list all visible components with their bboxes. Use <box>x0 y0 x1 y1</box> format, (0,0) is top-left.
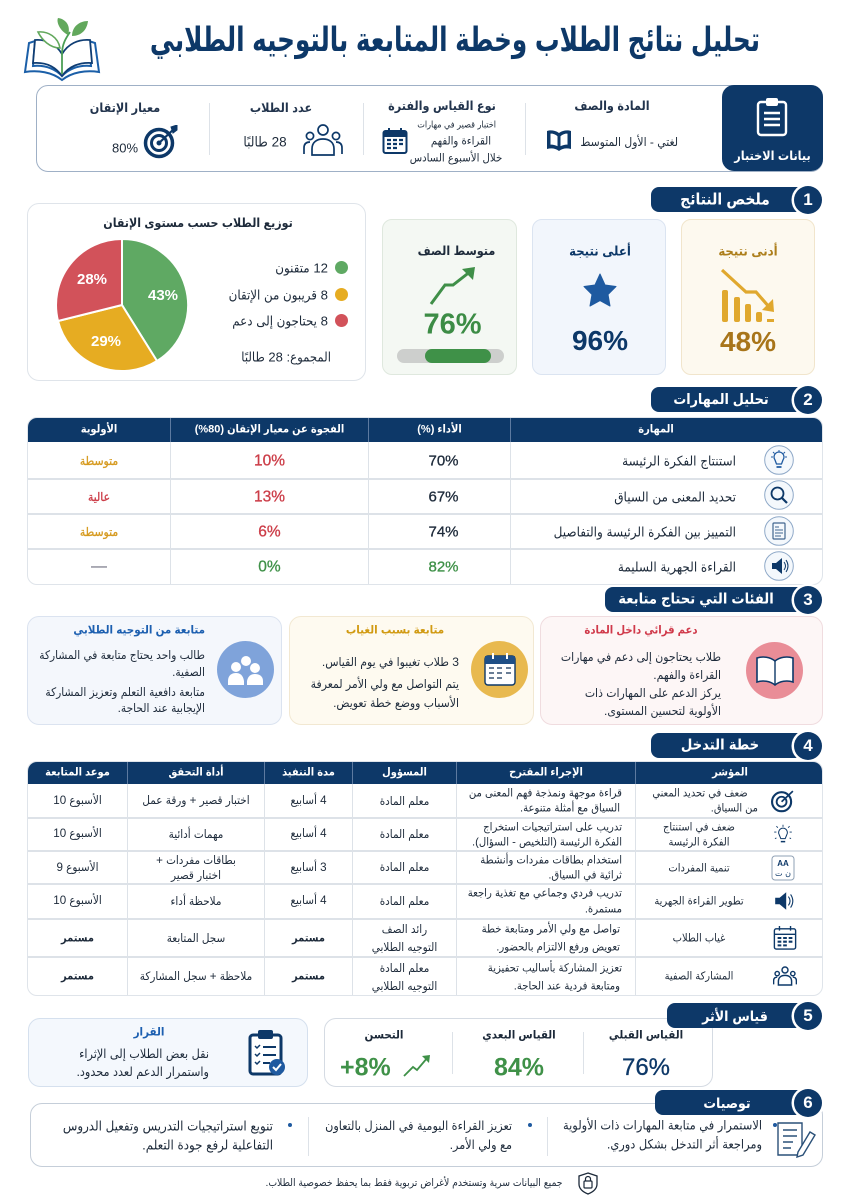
item: student count: عدد الطلاب <box>250 101 312 115</box>
row: meaning weakness: السياق مع أمثلة متنوعة. <box>520 802 620 814</box>
row: vocabulary: ثرائية في السياق. <box>548 869 622 881</box>
section heading 6: توصيات <box>703 1095 751 1111</box>
card: absence follow-up: الأسباب ووضع خطة تعويض. <box>333 696 459 710</box>
table header: أداة التحقق <box>168 766 224 778</box>
metric: post-measure <box>482 1029 556 1082</box>
item: measurement type and period <box>382 99 502 164</box>
row: main idea: 10% <box>254 452 285 469</box>
row: class participation: التوجيه الطلابي <box>372 980 437 993</box>
icon: clipboard <box>756 98 788 136</box>
section heading 4: خطة التدخل <box>681 738 759 754</box>
section heading 5: قياس الأثر <box>702 1008 768 1024</box>
row: absence <box>60 922 796 954</box>
row: main idea vs details: التمييز بين الفكرة الرئيسة والتفاصيل <box>554 524 736 539</box>
row: vocabulary: استخدام بطاقات مفردات وأنشطة <box>480 854 622 866</box>
row: class participation: مستمر <box>61 970 94 982</box>
panel: decision: نقل بعض الطلاب إلى الإثراء <box>79 1047 209 1061</box>
label: test data: بيانات الاختبار <box>734 149 811 163</box>
icon: calendar circle <box>471 641 528 698</box>
row: oral reading development: مستمرة. <box>585 903 622 915</box>
row: vocabulary: تنمية المفردات <box>668 862 730 874</box>
row: meaning from context: تحديد المعنى من السياق <box>614 489 736 504</box>
row: main idea <box>80 445 794 475</box>
row: oral reading: — <box>91 558 107 575</box>
row: main idea vs details <box>80 516 794 546</box>
card: highest score: 96% <box>572 325 628 356</box>
progress bar <box>397 349 504 363</box>
card: highest score <box>532 219 666 375</box>
row: meaning from context: 67% <box>428 488 459 506</box>
table header: المسؤول <box>382 766 427 778</box>
icon: shield lock <box>578 1172 598 1195</box>
legend: near mastery: 8 قريبون من الإتقان <box>229 287 328 302</box>
row: class participation: ومتابعة فردية عند الحاجة. <box>514 980 620 992</box>
metric: improvement <box>340 1029 430 1082</box>
table header: المؤشر <box>712 766 748 778</box>
item: measurement type and period: خلال الأسبوع السادس <box>410 152 502 164</box>
row: vocabulary: بطاقات مفردات + <box>156 854 236 867</box>
section heading 6: 6 <box>803 1093 813 1112</box>
card: guidance follow-up: الصفية. <box>172 665 205 679</box>
row: oral reading development: معلم المادة <box>380 895 429 908</box>
table header: الفجوة عن معيار الإتقان (80%) <box>195 424 344 436</box>
metric: post-measure: القياس البعدي <box>482 1029 556 1041</box>
card: reading support <box>540 616 823 725</box>
icon: falling chart <box>721 268 774 322</box>
item: student count: 28 طالبًا <box>243 134 287 149</box>
card: guidance follow-up: متابعة من التوجيه الطلابي <box>73 624 205 636</box>
chart title: توزيع الطلاب حسب مستوى الإتقان <box>103 216 293 230</box>
card: guidance follow-up: الإيجابية عند الحاجة. <box>118 701 205 715</box>
icon: star <box>584 274 616 306</box>
card: guidance follow-up <box>27 616 282 725</box>
card: absence follow-up: 3 طلاب تغيبوا في يوم القياس. <box>322 655 459 669</box>
row: main idea weakness: مهمات أدائية <box>169 828 223 841</box>
row: main idea weakness: الأسبوع 10 <box>53 827 102 840</box>
metric: pre-measure <box>609 1029 683 1081</box>
row: oral reading development: 4 أسابيع <box>290 894 327 907</box>
item: subject and class: لغتي - الأول المتوسط <box>580 135 678 149</box>
row: oral reading development: ملاحظة أداء <box>170 895 221 908</box>
card: absence follow-up: يتم التواصل مع ولي الأمر لمعرفة <box>311 677 459 691</box>
panel: impact measurement <box>324 1018 713 1087</box>
metric: pre-measure: 76% <box>622 1054 670 1081</box>
row: oral reading: 82% <box>428 558 459 576</box>
row: meaning weakness: قراءة موجهة ونمذجة فهم المعنى من <box>469 787 622 799</box>
section heading 5: 5 <box>803 1006 813 1025</box>
item: mastery criterion <box>90 101 178 158</box>
table: skills analysis <box>27 417 823 585</box>
table header: مدة التنفيذ <box>282 766 335 778</box>
row: main idea vs details: 6% <box>258 523 281 540</box>
row: oral reading development <box>53 887 794 915</box>
recommendation 1 <box>563 1118 777 1152</box>
logo: open book with plant <box>24 18 100 82</box>
row: oral reading <box>91 551 794 581</box>
row: vocabulary <box>56 852 794 882</box>
row: absence: غياب الطلاب <box>673 932 725 944</box>
item: subject and class: المادة والصف <box>574 99 650 113</box>
pie chart: 43% <box>148 287 178 304</box>
row: class participation: مستمر <box>292 970 325 982</box>
footer: privacy note: جميع البيانات سرية وتستخدم لأغراض تربوية فقط بما يحفظ خصوصية الطلاب. <box>265 1178 563 1189</box>
row: class participation: معلم المادة <box>380 962 429 975</box>
section heading 6 <box>655 1089 822 1117</box>
section heading 3: الفئات التي تحتاج متابعة <box>618 592 774 608</box>
recommendation 2 <box>325 1119 532 1152</box>
icon: document and pen <box>777 1122 816 1158</box>
row: main idea weakness: ضعف في استنتاج <box>663 822 735 834</box>
table header: المهارة <box>638 424 674 436</box>
card: lowest score: أدنى نتيجة <box>718 244 778 258</box>
row: absence: رائد الصف <box>382 923 427 936</box>
row: main idea weakness: الفكرة الرئيسة <box>668 836 730 848</box>
table: intervention plan <box>27 761 823 996</box>
recommendation 3 <box>63 1118 292 1153</box>
item: student count <box>243 101 343 156</box>
legend: mastered: 12 متقنون <box>275 260 328 275</box>
row: vocabulary: ن ت <box>775 869 791 878</box>
recommendation 2: تعزيز القراءة اليومية في المنزل بالتعاون <box>325 1119 512 1133</box>
row: meaning weakness: الأسبوع 10 <box>53 794 102 807</box>
row: absence: مستمر <box>61 932 94 944</box>
table header: الأولوية <box>81 424 117 436</box>
card: reading support: طلاب يحتاجون إلى دعم في مهارات <box>561 650 721 664</box>
section heading 4: 4 <box>803 736 813 755</box>
card: class average: متوسط الصف <box>418 244 495 258</box>
panel: decision <box>28 1018 308 1087</box>
row: absence: مستمر <box>292 932 325 944</box>
item: subject and class <box>547 99 678 151</box>
row: main idea weakness <box>53 821 792 848</box>
footer: privacy note <box>260 1172 605 1196</box>
icon: clipboard check <box>248 1030 285 1076</box>
chart total: المجموع: 28 طالبًا <box>241 350 331 364</box>
card: highest score: أعلى نتيجة <box>569 244 631 258</box>
row: oral reading development: تطوير القراءة الجهرية <box>654 896 744 908</box>
row: absence: التوجيه الطلابي <box>372 941 437 954</box>
row: oral reading: 0% <box>258 558 281 575</box>
row: vocabulary: AA <box>777 859 789 868</box>
section heading 5 <box>667 1002 822 1030</box>
panel: distribution pie chart <box>27 203 366 381</box>
section heading 3: 3 <box>803 590 813 609</box>
section heading 2 <box>651 386 822 414</box>
row: meaning weakness: اختبار قصير + ورقة عمل <box>142 794 250 807</box>
legend: mastered <box>275 260 348 276</box>
row: main idea weakness: 4 أسابيع <box>290 827 327 840</box>
metric: pre-measure: القياس القبلي <box>609 1029 683 1041</box>
panel: recommendations <box>30 1103 823 1167</box>
card: reading support: يركز الدعم على المهارات ذات <box>585 686 721 700</box>
pie chart: 29% <box>91 333 121 350</box>
row: main idea: متوسطة <box>80 454 118 468</box>
recommendation 3: التفاعلية لرفع جودة التعلم. <box>142 1137 273 1152</box>
row: absence: سجل المتابعة <box>167 932 225 945</box>
card: reading support: دعم قرائي داخل المادة <box>584 624 698 636</box>
row: absence: تعويض ورفع الالتزام بالحضور. <box>496 941 620 953</box>
row: vocabulary: الأسبوع 9 <box>56 861 99 874</box>
card: absence follow-up <box>289 616 534 725</box>
table header <box>81 422 674 436</box>
row: meaning weakness: معلم المادة <box>380 795 429 808</box>
row: absence: تواصل مع ولي الأمر ومتابعة خطة <box>482 923 620 935</box>
section heading 1: ملخص النتائج <box>680 191 770 208</box>
card: lowest score <box>681 219 815 375</box>
section heading 4 <box>651 732 822 760</box>
card: class average <box>382 219 517 375</box>
metric: improvement: +8% <box>340 1054 391 1082</box>
pie chart <box>57 240 188 370</box>
row: meaning from context: 13% <box>254 488 285 505</box>
section heading 2: تحليل المهارات <box>673 392 769 408</box>
item: measurement type and period: نوع القياس والفترة <box>388 99 496 113</box>
section heading 1 <box>651 186 822 214</box>
row: meaning from context: عالية <box>88 490 110 504</box>
row: class participation: المشاركة الصفية <box>665 970 733 982</box>
card: guidance follow-up: متابعة دافعية التعلم وتعزيز المشاركة <box>45 685 205 699</box>
panel: decision: القرار <box>134 1026 164 1038</box>
title: تحليل نتائج الطلاب وخطة المتابعة بالتوجيه الطلابي <box>150 22 760 59</box>
row: main idea weakness: الفكرة الرئيسة (التلخيص - السؤال). <box>472 836 622 848</box>
recommendation 3: تنويع استراتيجيات التدريس وتفعيل الدروس <box>63 1118 273 1133</box>
row: main idea weakness: معلم المادة <box>380 828 429 841</box>
card: reading support: القراءة والفهم. <box>653 668 721 682</box>
item: mastery criterion: معيار الإتقان <box>90 101 160 115</box>
row: meaning weakness: ضعف في تحديد المعني <box>652 788 748 800</box>
row: meaning weakness <box>53 787 794 814</box>
panel: test data <box>36 85 823 172</box>
row: vocabulary: اختبار قصير <box>171 869 221 882</box>
icon: people circle <box>217 641 274 698</box>
row: vocabulary: 3 أسابيع <box>290 861 327 874</box>
row: meaning weakness: 4 أسابيع <box>290 794 327 807</box>
row: meaning from context <box>88 480 794 510</box>
card: guidance follow-up: طالب واحد يحتاج متابعة في المشاركة <box>39 648 205 662</box>
metric: post-measure: 84% <box>494 1054 544 1082</box>
recommendation 2: مع ولي الأمر. <box>450 1138 512 1152</box>
card: absence follow-up: متابعة بسبب الغياب <box>346 624 444 636</box>
row: main idea weakness: تدريب على استراتيجيات استخراج <box>483 821 622 833</box>
section heading 1: 1 <box>803 190 813 209</box>
card: reading support: الأولوية لتحسين المستوى. <box>604 704 721 718</box>
row: vocabulary: معلم المادة <box>380 861 429 874</box>
row: oral reading: القراءة الجهرية السليمة <box>618 559 736 574</box>
item: measurement type and period: القراءة والفهم <box>431 135 491 147</box>
row: main idea vs details: 74% <box>428 524 459 540</box>
table header: موعد المتابعة <box>45 766 110 778</box>
row: oral reading development: الأسبوع 10 <box>53 894 102 907</box>
header block: test data <box>722 85 823 171</box>
section heading 3 <box>605 584 822 614</box>
icon: rising arrow <box>430 267 475 305</box>
section heading 2: 2 <box>803 390 813 409</box>
row: class participation: تعزيز المشاركة بأساليب تحفيزية <box>488 962 622 974</box>
metric: improvement: التحسن <box>365 1029 403 1041</box>
legend: need support: 8 يحتاجون إلى دعم <box>232 313 328 328</box>
row: main idea: 70% <box>428 452 459 470</box>
row: class participation <box>60 960 797 993</box>
panel: decision: واستمرار الدعم لعدد محدود. <box>76 1065 209 1079</box>
table header: الأداء (%) <box>417 424 462 436</box>
item: measurement type and period: اختبار قصير في مهارات <box>417 120 496 130</box>
table header: الإجراء المقترح <box>509 766 583 778</box>
card: class average: 76% <box>423 308 482 340</box>
row: main idea vs details: متوسطة <box>80 525 118 539</box>
card: lowest score: 48% <box>720 326 776 357</box>
row: class participation: ملاحظة + سجل المشاركة <box>140 970 252 983</box>
recommendation 1: الاستمرار في متابعة المهارات ذات الأولوية <box>563 1119 762 1133</box>
icon: book circle <box>746 642 803 699</box>
recommendation 1: ومراجعة أثر التدخل بشكل دوري. <box>607 1138 762 1152</box>
row: oral reading development: تدريب فردي وجماعي مع تغذية راجعة <box>468 887 622 899</box>
item: mastery criterion: 80% <box>112 140 138 156</box>
row: meaning weakness: من السياق. <box>711 802 758 814</box>
pie chart: 28% <box>77 271 107 288</box>
row: main idea: استنتاج الفكرة الرئيسة <box>622 453 736 468</box>
table header <box>45 764 748 778</box>
